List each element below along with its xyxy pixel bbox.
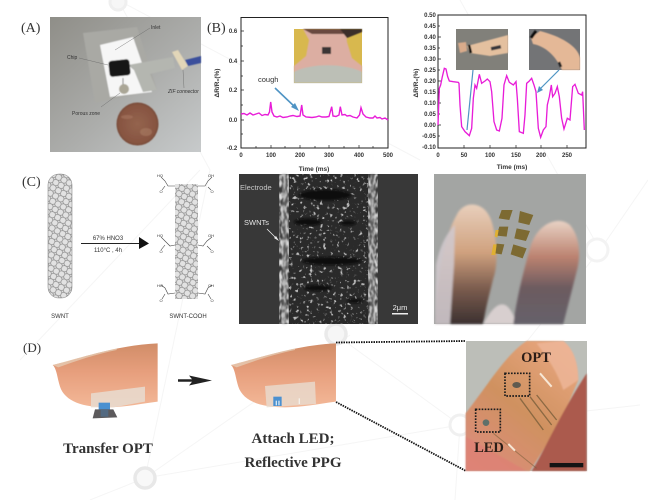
inset photo: straight arm bbox=[456, 29, 508, 70]
chart: arm bending response: 150 bbox=[511, 153, 522, 159]
reaction arrow with conditions bbox=[81, 236, 149, 254]
panel C: SEM micrograph: 2μm bbox=[393, 303, 407, 312]
chart: cough response bbox=[214, 18, 394, 173]
panel C: SEM micrograph: Electrode bbox=[240, 183, 272, 192]
chart: cough response: 0.2 bbox=[229, 88, 238, 94]
caption: Attach LED; Reflective PPG: Reflective PPG bbox=[244, 455, 342, 471]
chart: arm bending response bbox=[413, 13, 586, 171]
illustration: finger with attached LED bbox=[231, 343, 336, 407]
white paper substrate bbox=[100, 37, 152, 97]
OPT device box bbox=[505, 373, 530, 396]
chart: cough response: 100 bbox=[266, 153, 277, 159]
arrow: process step bbox=[178, 376, 212, 386]
label: panel A: (A) bbox=[21, 21, 41, 36]
chart: arm bending response: 250 bbox=[562, 153, 573, 159]
label: panel B: (B) bbox=[207, 21, 226, 36]
panel A: microfluidic chip photo: Porous zone bbox=[72, 111, 100, 117]
chart: arm bending response: -0.10 bbox=[422, 145, 436, 151]
chart: cough response: -0.2 bbox=[227, 146, 238, 152]
diagram: SWNT-COOH nanotube: OH bbox=[208, 173, 214, 178]
leader lines bbox=[79, 28, 184, 107]
diagram: SWNT-COOH nanotube: O bbox=[159, 249, 163, 254]
diagram: SWNT-COOH nanotube: OH bbox=[208, 283, 214, 288]
chart: arm bending response: 0 bbox=[436, 153, 440, 159]
chart: arm bending response: 200 bbox=[536, 153, 547, 159]
chart: cough response: 0 bbox=[239, 153, 243, 159]
black chip bbox=[108, 59, 131, 77]
electrode traces bbox=[493, 395, 557, 468]
chart: arm bending response: 50 bbox=[461, 153, 468, 159]
reaction arrow with conditions: 110°C , 4h bbox=[94, 248, 122, 254]
diagram: SWNT-COOH nanotube: SWNT-COOH bbox=[169, 314, 207, 320]
arrow: bent arm pointer bbox=[537, 70, 559, 93]
chart: arm bending response: 0.00 bbox=[424, 123, 436, 129]
chart: arm bending response: Time (ms) bbox=[497, 164, 527, 171]
illustration: finger with OPT transfer bbox=[53, 343, 158, 418]
reaction arrow with conditions: 67% HNO3 bbox=[93, 236, 124, 242]
chart: arm bending response: 0.40 bbox=[424, 35, 436, 41]
inset photo: bent arm bbox=[529, 29, 580, 70]
chart: arm bending response: -0.05 bbox=[422, 134, 436, 140]
chart: cough response: Time (ms) bbox=[299, 166, 329, 173]
tape strip bbox=[128, 57, 175, 92]
diagram: SWNT-COOH nanotube: HO bbox=[157, 283, 163, 288]
panel D: photo of sensor on finger: OPT bbox=[521, 350, 551, 366]
diagram: SWNT-COOH nanotube: HO bbox=[157, 233, 163, 238]
caption: Transfer OPT: Transfer OPT bbox=[63, 441, 153, 457]
caption: Attach LED; Reflective PPG bbox=[244, 431, 342, 471]
chart: arm bending response: 0.20 bbox=[424, 79, 436, 85]
diagram: SWNT-COOH nanotube: O bbox=[210, 298, 214, 303]
chart: cough response: 400 bbox=[354, 153, 365, 159]
arrow: cough pointer bbox=[275, 88, 299, 111]
chart: arm bending response: 100 bbox=[485, 153, 496, 159]
chart: arm bending response: ΔR/R₀(%) bbox=[413, 69, 420, 97]
annotation: cough: cough bbox=[258, 75, 278, 84]
diagram: SWNT nanotube: SWNT bbox=[51, 314, 69, 320]
diagram: SWNT-COOH nanotube: OH bbox=[208, 233, 214, 238]
chart: cough response: ΔR/R₀(%) bbox=[214, 69, 221, 97]
scale bar bbox=[550, 463, 583, 467]
chart: arm bending response: 0.10 bbox=[424, 101, 436, 107]
diagram: SWNT-COOH nanotube: O bbox=[210, 189, 214, 194]
panel A: microfluidic chip photo bbox=[50, 17, 201, 152]
panel C: SEM micrograph: SWNTs bbox=[244, 218, 269, 227]
caption: Attach LED; Reflective PPG: Attach LED; bbox=[252, 431, 334, 447]
porous zone bbox=[119, 84, 129, 94]
diagram: SWNT-COOH nanotube: O bbox=[159, 189, 163, 194]
chart: arm bending response: 0.50 bbox=[424, 13, 436, 19]
panel A: microfluidic chip photo: Inlet bbox=[151, 25, 161, 31]
chart: arm bending response: 0.45 bbox=[424, 24, 436, 30]
zoom guide lines bbox=[336, 341, 466, 471]
diagram: SWNT nanotube bbox=[48, 174, 72, 320]
ZIF connector bbox=[172, 50, 188, 70]
panel C: flexible sensor on fingers photo bbox=[434, 174, 586, 324]
chart: cough response: 0.6 bbox=[229, 29, 238, 35]
arrow: straight arm pointer bbox=[467, 70, 473, 130]
diagram: SWNT-COOH nanotube: HO bbox=[157, 173, 163, 178]
chart: arm bending response: 0.35 bbox=[424, 46, 436, 52]
label: panel D: (D) bbox=[23, 340, 41, 355]
chart: cough response: 300 bbox=[324, 153, 335, 159]
diagram: SWNT-COOH nanotube: O bbox=[210, 249, 214, 254]
coin bbox=[116, 102, 158, 146]
diagram: SWNT-COOH nanotube bbox=[157, 173, 214, 320]
chart: cough response: 0.0 bbox=[229, 118, 238, 124]
inset photo: neck bbox=[294, 29, 362, 83]
panel A: microfluidic chip photo: Chip bbox=[67, 55, 78, 61]
chart: cough response: 200 bbox=[295, 153, 306, 159]
panel A: microfluidic chip photo: ZIF connector bbox=[167, 89, 199, 95]
chart: arm bending response: 0.05 bbox=[424, 112, 436, 118]
panel D: photo of sensor on finger: LED bbox=[474, 440, 504, 456]
panel C: SEM micrograph bbox=[239, 174, 418, 324]
chart: arm bending response: 0.15 bbox=[424, 90, 436, 96]
LED device box bbox=[476, 409, 500, 432]
translucent film bbox=[83, 27, 157, 103]
panel D: photo of sensor on finger bbox=[466, 341, 587, 471]
label: panel C: (C) bbox=[22, 175, 41, 190]
chart: cough response: 500 bbox=[383, 153, 394, 159]
chart: arm bending response: 0.25 bbox=[424, 68, 436, 74]
chart: arm bending response: 0.30 bbox=[424, 57, 436, 63]
chart: cough response: 0.4 bbox=[229, 59, 238, 65]
diagram: SWNT-COOH nanotube: O bbox=[159, 298, 163, 303]
